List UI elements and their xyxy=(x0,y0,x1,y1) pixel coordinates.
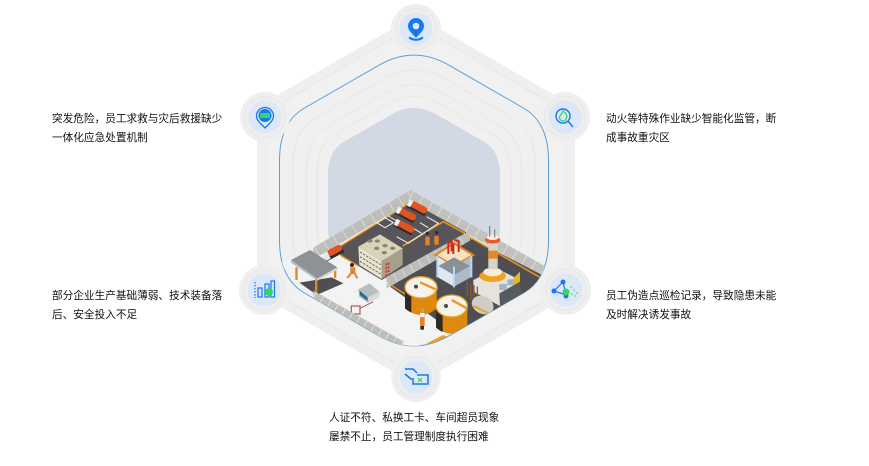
horizontal cylinder xyxy=(472,296,494,314)
parking asphalt xyxy=(341,202,467,280)
node: top location pin xyxy=(391,4,441,54)
workers xyxy=(347,231,439,330)
text: inspection fraud xyxy=(606,290,776,321)
node: ID card swipe xyxy=(391,352,441,402)
text: inspection fraud: 员工伪造点巡检记录，导致隐患未能 xyxy=(606,290,776,302)
control tower and base xyxy=(467,226,522,306)
tanker truck 3 xyxy=(393,218,415,236)
node: network graph xyxy=(541,265,591,315)
text: personnel management: 人证不符、私换工卡、车间超员现象 xyxy=(329,412,499,424)
text: production foundation xyxy=(52,290,222,321)
node: fire inspection magnifier xyxy=(540,92,590,142)
lower asphalt xyxy=(390,237,548,337)
blue frame plant xyxy=(435,240,473,287)
yellow crossing stripe xyxy=(427,335,447,345)
front fence xyxy=(312,290,404,345)
text: special operations xyxy=(606,112,776,144)
office building xyxy=(358,234,403,279)
text: special operations: 成事故重灾区 xyxy=(606,132,670,144)
inner fence xyxy=(387,231,470,288)
storage tank 1 xyxy=(405,277,437,315)
text: special operations: 动火等特殊作业缺少智能化监管，断 xyxy=(606,113,776,125)
text: emergency response: 一体化应急处置机制 xyxy=(52,132,148,144)
back wall right xyxy=(411,190,552,281)
tanker truck 1 xyxy=(406,199,428,216)
text: emergency response: 突发危险，员工求救与灾后救援缺少 xyxy=(52,113,222,125)
node: SOS pin xyxy=(240,92,290,142)
isometric factory illustration xyxy=(277,190,552,353)
text: personnel management: 屡禁不止，员工管理制度执行困难 xyxy=(329,431,489,443)
text: production foundation: 部分企业生产基础薄弱、技术装备落 xyxy=(52,290,222,302)
node: bar chart xyxy=(239,265,289,315)
gate barrier xyxy=(351,302,373,314)
outer hexagon band xyxy=(257,15,575,385)
text: personnel management xyxy=(329,412,499,443)
gate booth xyxy=(358,283,379,303)
text: emergency response xyxy=(52,112,222,144)
gas station canopy xyxy=(291,250,343,295)
text: production foundation: 后、安全投入不足 xyxy=(52,309,137,321)
parking lines xyxy=(377,216,438,243)
hexagon diagram xyxy=(239,4,591,402)
back wall left xyxy=(313,190,411,259)
tanker truck 4 xyxy=(322,244,344,261)
concentric rounded rings xyxy=(280,55,548,346)
factory floor xyxy=(282,210,544,346)
tanker truck 2 xyxy=(395,206,417,223)
storage tank 2 xyxy=(436,295,467,334)
text: inspection fraud: 及时解决诱发事故 xyxy=(606,309,691,321)
